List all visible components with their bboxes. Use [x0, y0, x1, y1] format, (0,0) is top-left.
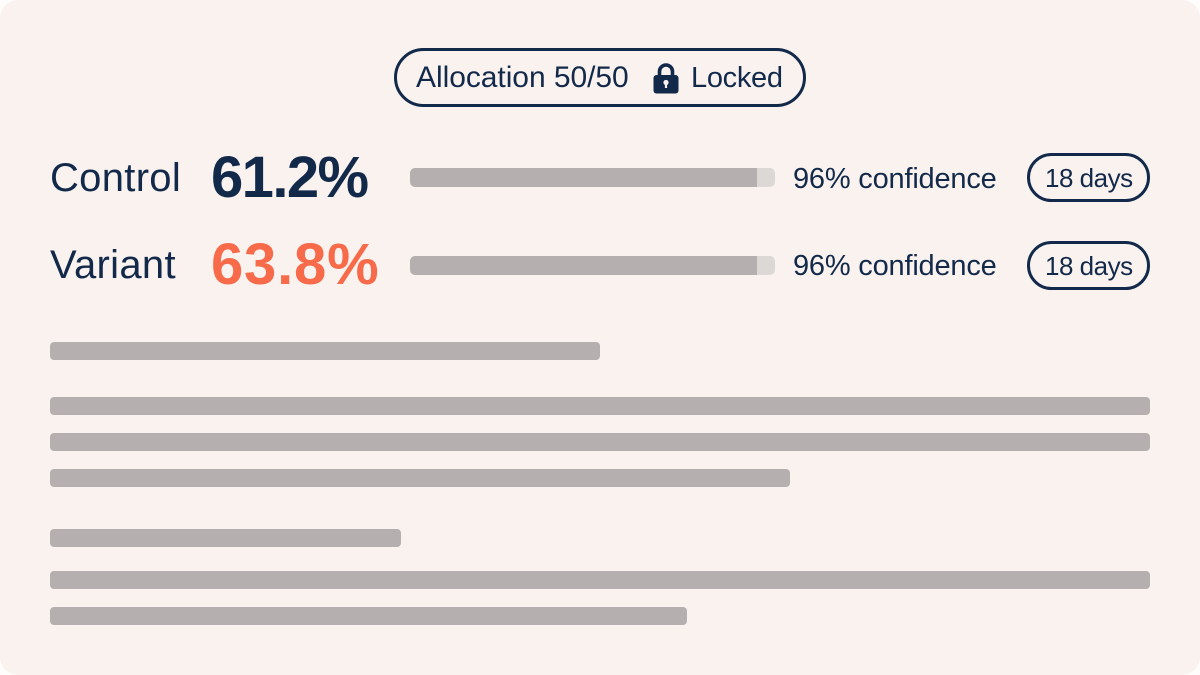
placeholder line 4 — [50, 571, 1150, 589]
control confidence: 96% confidence — [793, 163, 997, 195]
placeholder heading line — [50, 342, 600, 360]
placeholder text block 2 — [50, 529, 1150, 625]
control progress bar — [410, 168, 775, 187]
control label: Control — [50, 156, 181, 200]
allocation text: Allocation 50/50 — [416, 61, 629, 94]
control value: 61.2% — [211, 145, 367, 210]
variant confidence: 96% confidence — [793, 250, 997, 282]
allocation pill — [394, 48, 806, 107]
variant progress bar — [410, 256, 775, 275]
placeholder text block 1 — [50, 342, 1150, 487]
variant value: 63.8% — [211, 232, 379, 297]
variant duration pill — [1027, 241, 1150, 290]
placeholder line 5 — [50, 607, 687, 625]
icon: padlock — [654, 63, 678, 94]
variant duration text: 18 days — [1045, 251, 1133, 281]
control duration pill — [1027, 153, 1150, 202]
variant label: Variant — [50, 243, 176, 287]
placeholder subheading line — [50, 529, 401, 547]
placeholder line 2 — [50, 433, 1150, 451]
placeholder line 1 — [50, 397, 1150, 415]
placeholder line 3 — [50, 469, 790, 487]
control duration text: 18 days — [1045, 163, 1133, 193]
locked text: Locked — [691, 62, 783, 94]
